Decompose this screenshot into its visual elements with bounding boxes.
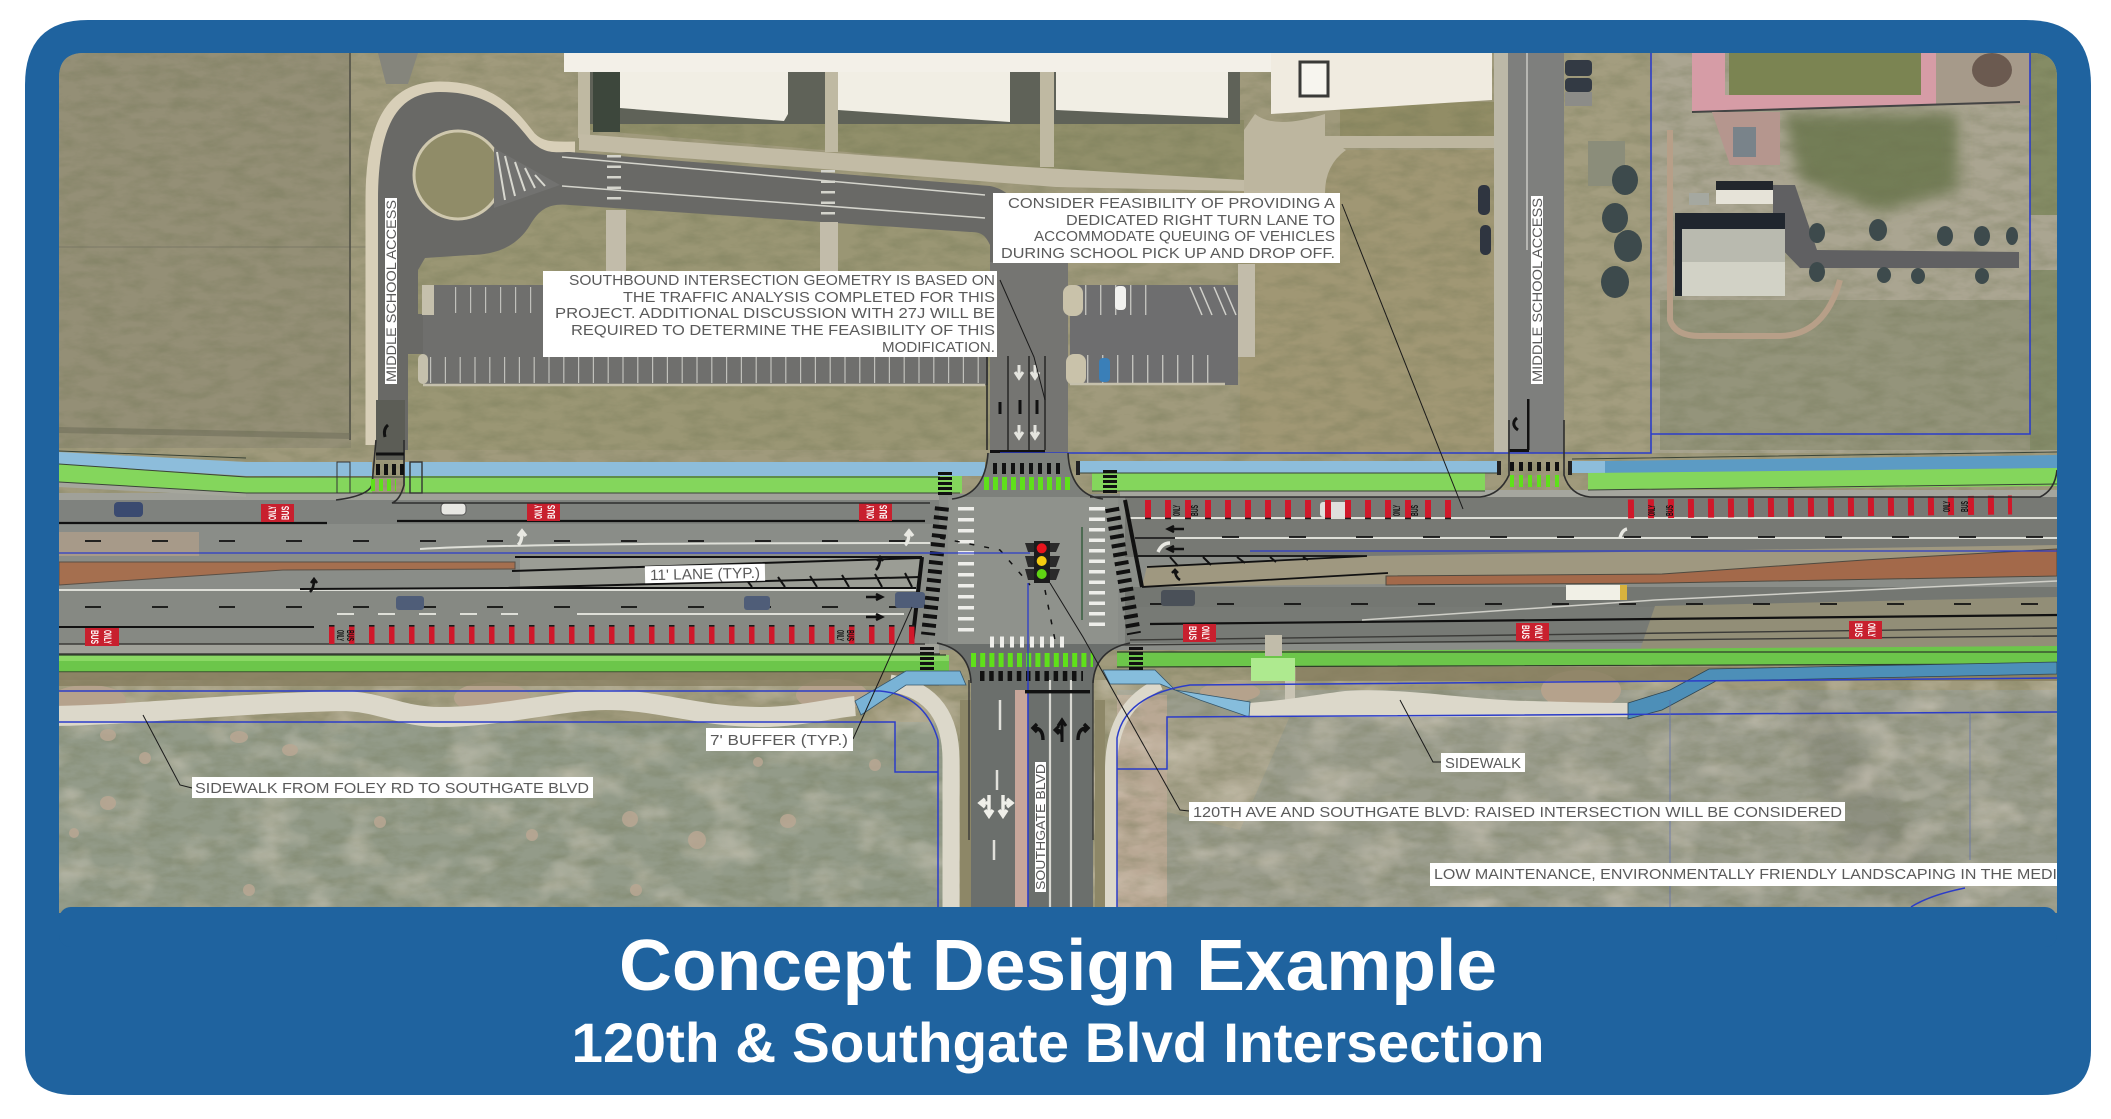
trees	[1601, 165, 2018, 298]
callout: southbound geometry: THE TRAFFIC ANALYSIS COMPLETED FOR THIS	[623, 289, 995, 306]
black bus-only pavement legends: BUS	[844, 630, 855, 641]
black bus-only pavement legends: ONLY	[1392, 505, 1403, 516]
south-west meandering sidewalk	[50, 700, 855, 717]
bus only signs: BUS	[1519, 625, 1531, 639]
bus only signs: ONLY	[1199, 626, 1211, 640]
label: middle school access west: MIDDLE SCHOOL ACCESS	[384, 200, 399, 382]
south crosswalk	[971, 660, 1093, 676]
callout: southbound geometry: MODIFICATION.	[882, 339, 995, 356]
east dark-blue sidewalk buffer	[1628, 662, 2057, 719]
aerial texture	[59, 53, 2057, 913]
base land	[59, 53, 2057, 913]
lane striping west	[59, 521, 940, 654]
black bus-only pavement legends: BUS	[1190, 505, 1201, 516]
intersection west crosswalk	[928, 507, 942, 635]
label: sidewalk from Foley Rd: SIDEWALK FROM FOLEY RD TO SOUTHGATE BLVD	[195, 780, 589, 797]
south-east curving sidewalk	[1111, 684, 1160, 915]
south verge mounds	[50, 670, 1621, 715]
cul-de-sac curb	[372, 88, 575, 445]
south side bike lane east	[1117, 635, 2057, 703]
bus only signs: BUS	[546, 505, 558, 519]
eastern parcel metal building	[1675, 213, 1785, 296]
bus only signs	[85, 503, 1882, 646]
parked cars on lawn	[1478, 185, 1491, 255]
bus lane red bars east second group	[1628, 505, 2012, 509]
south-east crossing buffer	[1103, 670, 1250, 717]
7 ft buffer and other leader lines	[143, 204, 1463, 811]
traffic island	[414, 131, 560, 219]
walkway along drop-off	[579, 134, 1244, 191]
south side bike lane west	[59, 655, 949, 672]
north-middle lawns	[506, 102, 1494, 248]
south-east sidewalk	[1249, 690, 1628, 717]
aerial site plan map: ONLY	[834, 630, 845, 641]
olive strip by south road	[960, 700, 1105, 915]
sidewalk ladder crossings	[927, 470, 1136, 672]
black bus-only pavement legends: BUS	[1960, 501, 1971, 512]
eastern parcel path	[1670, 130, 1840, 336]
parcel lines south-east	[1117, 678, 2057, 907]
bus lane red bars west	[329, 626, 917, 634]
label: raised intersection: 120TH AVE AND SOUTHGATE BLVD: RAISED INTERSECTION WILL BE CONSIDERED	[1193, 804, 1842, 821]
east median gravel wedge	[1142, 545, 2057, 587]
access stub north	[378, 53, 418, 84]
black bus-only pavement legends: BUS	[1410, 505, 1421, 516]
bus only signs: BUS	[878, 505, 890, 519]
callout: southbound geometry: SOUTHBOUND INTERSECTION GEOMETRY IS BASED ON	[569, 272, 995, 289]
east school access road	[1494, 53, 1592, 453]
intersection white crossing bars	[966, 507, 1097, 642]
school building and wings	[564, 53, 1494, 193]
west field	[59, 53, 1600, 448]
south leg blue line continuation	[1027, 583, 1029, 683]
callout: right turn lane: ACCOMMODATE QUEUING OF VEHICLES	[1034, 228, 1335, 245]
bus lane red bars east first group	[1145, 510, 1454, 518]
black bus-only pavement legends	[334, 501, 1971, 641]
label: middle school access east: MIDDLE SCHOOL ACCESS	[1530, 198, 1545, 382]
label: buffer	[706, 728, 853, 751]
eastern parcel pink plaza	[1692, 53, 2030, 165]
callout: right turn lane: DEDICATED RIGHT TURN LANE TO	[1066, 212, 1335, 229]
bus only signs: ONLY	[1532, 625, 1544, 639]
traffic signal icon	[1025, 541, 1060, 583]
south leg and intersection asphalt	[937, 497, 1130, 915]
west parking lot	[418, 285, 988, 385]
bus only signs: ONLY	[1865, 623, 1877, 637]
lane striping east	[1120, 518, 2057, 645]
bus only signs: ONLY	[101, 630, 113, 644]
aerial site plan map: ONLY	[334, 630, 345, 641]
east left-turn pocket	[1125, 500, 1388, 587]
callout: right turn lane: DURING SCHOOL PICK UP AND DROP OFF.	[1001, 245, 1335, 262]
intersection east crosswalk	[1112, 508, 1134, 634]
label: Southgate Blvd: SOUTHGATE BLVD	[1033, 764, 1048, 890]
concrete pad	[1588, 141, 1625, 186]
eastern parcel boundary	[1000, 53, 2030, 453]
drop-off lane striping	[562, 155, 985, 224]
label: landscaping: LOW MAINTENANCE, ENVIRONMENTALLY FRIENDLY LANDSCAPING IN THE MEDI	[1434, 866, 2057, 883]
label: buffer: 7' BUFFER (TYP.)	[710, 732, 848, 749]
label: sidewalk: SIDEWALK	[1445, 755, 1521, 772]
north side buffer and bike lane west	[59, 451, 985, 497]
field pink dots	[69, 729, 881, 896]
west approach curb road	[376, 400, 405, 460]
east access crosswalk	[1510, 466, 1562, 481]
west access crosswalk	[371, 425, 405, 485]
traffic direction arrows	[310, 526, 1184, 620]
eastern parcel driveway	[1773, 185, 2019, 268]
eastern parcel shed and trailer	[1689, 127, 1773, 205]
left turn path dashes	[940, 538, 1055, 640]
bus only signs: ONLY	[533, 505, 545, 519]
east median brick	[1386, 549, 2057, 585]
title: Concept Design Example	[619, 926, 1497, 1006]
callout: southbound geometry	[543, 271, 997, 357]
west median brick	[59, 562, 515, 585]
white pavement arrows	[518, 529, 1627, 552]
bus only signs: ONLY	[267, 506, 279, 520]
lower south-east field	[1117, 690, 2057, 912]
label: landscaping	[1430, 863, 2057, 886]
label: lane width: 11' LANE (TYP.)	[650, 565, 760, 584]
north approach road	[987, 262, 1068, 457]
lower south-west field	[59, 722, 945, 912]
bus only signs: BUS	[1186, 626, 1198, 640]
pedestrian connectors	[606, 210, 838, 272]
subtitle: 120th & Southgate Blvd Intersection	[572, 1011, 1544, 1074]
main road surface	[59, 490, 2057, 655]
aerial site plan map: ONLY	[1942, 501, 1953, 512]
callout: right turn lane	[993, 193, 1340, 263]
callout: southbound geometry: REQUIRED TO DETERMINE THE FEASIBILITY OF THIS	[571, 322, 995, 339]
eastern parcel ground	[1651, 53, 2057, 453]
north leg asphalt at intersection	[952, 453, 1103, 499]
curb returns	[336, 420, 2057, 683]
black bus-only pavement legends: BUS	[1665, 505, 1676, 516]
callout: southbound geometry: PROJECT. ADDITIONAL DISCUSSION WITH 27J WILL BE	[555, 305, 995, 322]
south-west curving sidewalk	[890, 683, 951, 915]
black bus-only pavement legends: ONLY	[1172, 505, 1183, 516]
north side buffer and bike lane east	[1076, 452, 2057, 491]
bus only signs: BUS	[280, 506, 292, 520]
bus only signs: ONLY	[865, 505, 877, 519]
callout: right turn lane: CONSIDER FEASIBILITY OF PROVIDING A	[1008, 195, 1335, 212]
black bus-only pavement legends: BUS	[344, 630, 355, 641]
north crosswalk	[984, 468, 1071, 484]
west left-turn pocket	[300, 557, 922, 644]
bus only signs: BUS	[88, 630, 100, 644]
thin survey lines south-east	[1670, 700, 1970, 907]
south verge olive strip	[59, 667, 2057, 686]
signal pole shadow	[1081, 527, 1083, 620]
south-west crossing buffer	[855, 671, 966, 715]
parcel lines south-west	[59, 691, 938, 915]
road vehicles	[114, 502, 1627, 610]
east-west blue centerline	[59, 551, 2057, 553]
title panel	[59, 907, 2057, 1074]
aerial speckle	[59, 680, 2057, 912]
south leg lane arrows	[1033, 720, 1088, 742]
aerial site plan map	[50, 53, 2057, 915]
cul-de-sac and drop-off asphalt	[378, 92, 1025, 450]
south leg white pavement arrows	[980, 795, 1012, 816]
school access verge	[1564, 246, 1600, 248]
east parking lot	[1063, 264, 1255, 385]
black bus-only pavement legends: ONLY	[1647, 505, 1658, 516]
bus only signs: BUS	[1852, 623, 1864, 637]
